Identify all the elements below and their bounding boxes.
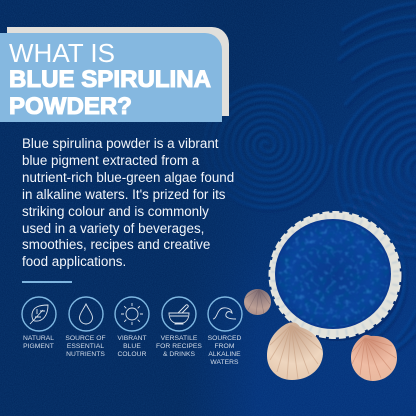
label: essential nutrients: ESSENTIAL	[67, 343, 104, 350]
small shell	[244, 289, 271, 315]
label: versatile: & DRINKS	[163, 351, 195, 358]
body text: in alkaline waters. It's prized for its	[22, 187, 226, 202]
icon: mortar and pestle	[161, 296, 197, 332]
icon: wave	[207, 296, 243, 332]
body text	[22, 136, 234, 269]
label: natural pigment: NATURAL	[23, 335, 54, 342]
body text: striking colour and is commonly	[22, 204, 209, 219]
heading: WHAT IS	[9, 38, 115, 68]
banner front plate	[0, 33, 222, 122]
pink shell	[351, 335, 397, 381]
body text: smoothies, recipes and creative	[22, 237, 210, 252]
label: natural pigment	[23, 335, 54, 350]
body text: food applications.	[22, 254, 126, 269]
icon row	[21, 296, 243, 366]
label: vibrant blue colour: BLUE	[123, 343, 141, 350]
label: alkaline waters	[208, 335, 241, 366]
label: essential nutrients	[65, 335, 106, 358]
icon: sun	[114, 296, 150, 332]
label: natural pigment: PIGMENT	[23, 343, 54, 350]
label: alkaline waters: SOURCED	[208, 335, 241, 342]
label: essential nutrients: NUTRIENTS	[66, 351, 105, 358]
title banner	[0, 27, 229, 122]
label: essential nutrients: SOURCE OF	[65, 335, 106, 342]
icon: leaf	[21, 296, 57, 332]
banner back plate	[7, 27, 229, 116]
heading: POWDER?	[9, 93, 132, 120]
blue powder	[275, 219, 391, 329]
large shell	[267, 322, 323, 380]
label: versatile: FOR RECIPES	[156, 343, 202, 350]
icon: drop	[68, 296, 104, 332]
label: vibrant blue colour: VIBRANT	[117, 335, 147, 342]
label: alkaline waters: ALKALINE	[208, 351, 241, 358]
label: vibrant blue colour: COLOUR	[118, 351, 146, 358]
label: vibrant blue colour	[117, 335, 147, 358]
heading: BLUE SPIRULINA	[9, 66, 211, 93]
label: versatile: VERSATILE	[161, 335, 197, 342]
body text: blue pigment extracted from a	[22, 153, 199, 168]
divider	[22, 281, 72, 282]
label: versatile	[156, 335, 202, 358]
heading	[9, 38, 212, 120]
label: alkaline waters: WATERS	[210, 359, 239, 366]
body text: nutrient-rich blue-green algae found	[22, 170, 234, 185]
bowl	[270, 212, 403, 341]
label: alkaline waters: FROM	[215, 343, 234, 350]
body text: Blue spirulina powder is a vibrant	[22, 136, 218, 151]
body text: used in a variety of beverages,	[22, 221, 204, 236]
